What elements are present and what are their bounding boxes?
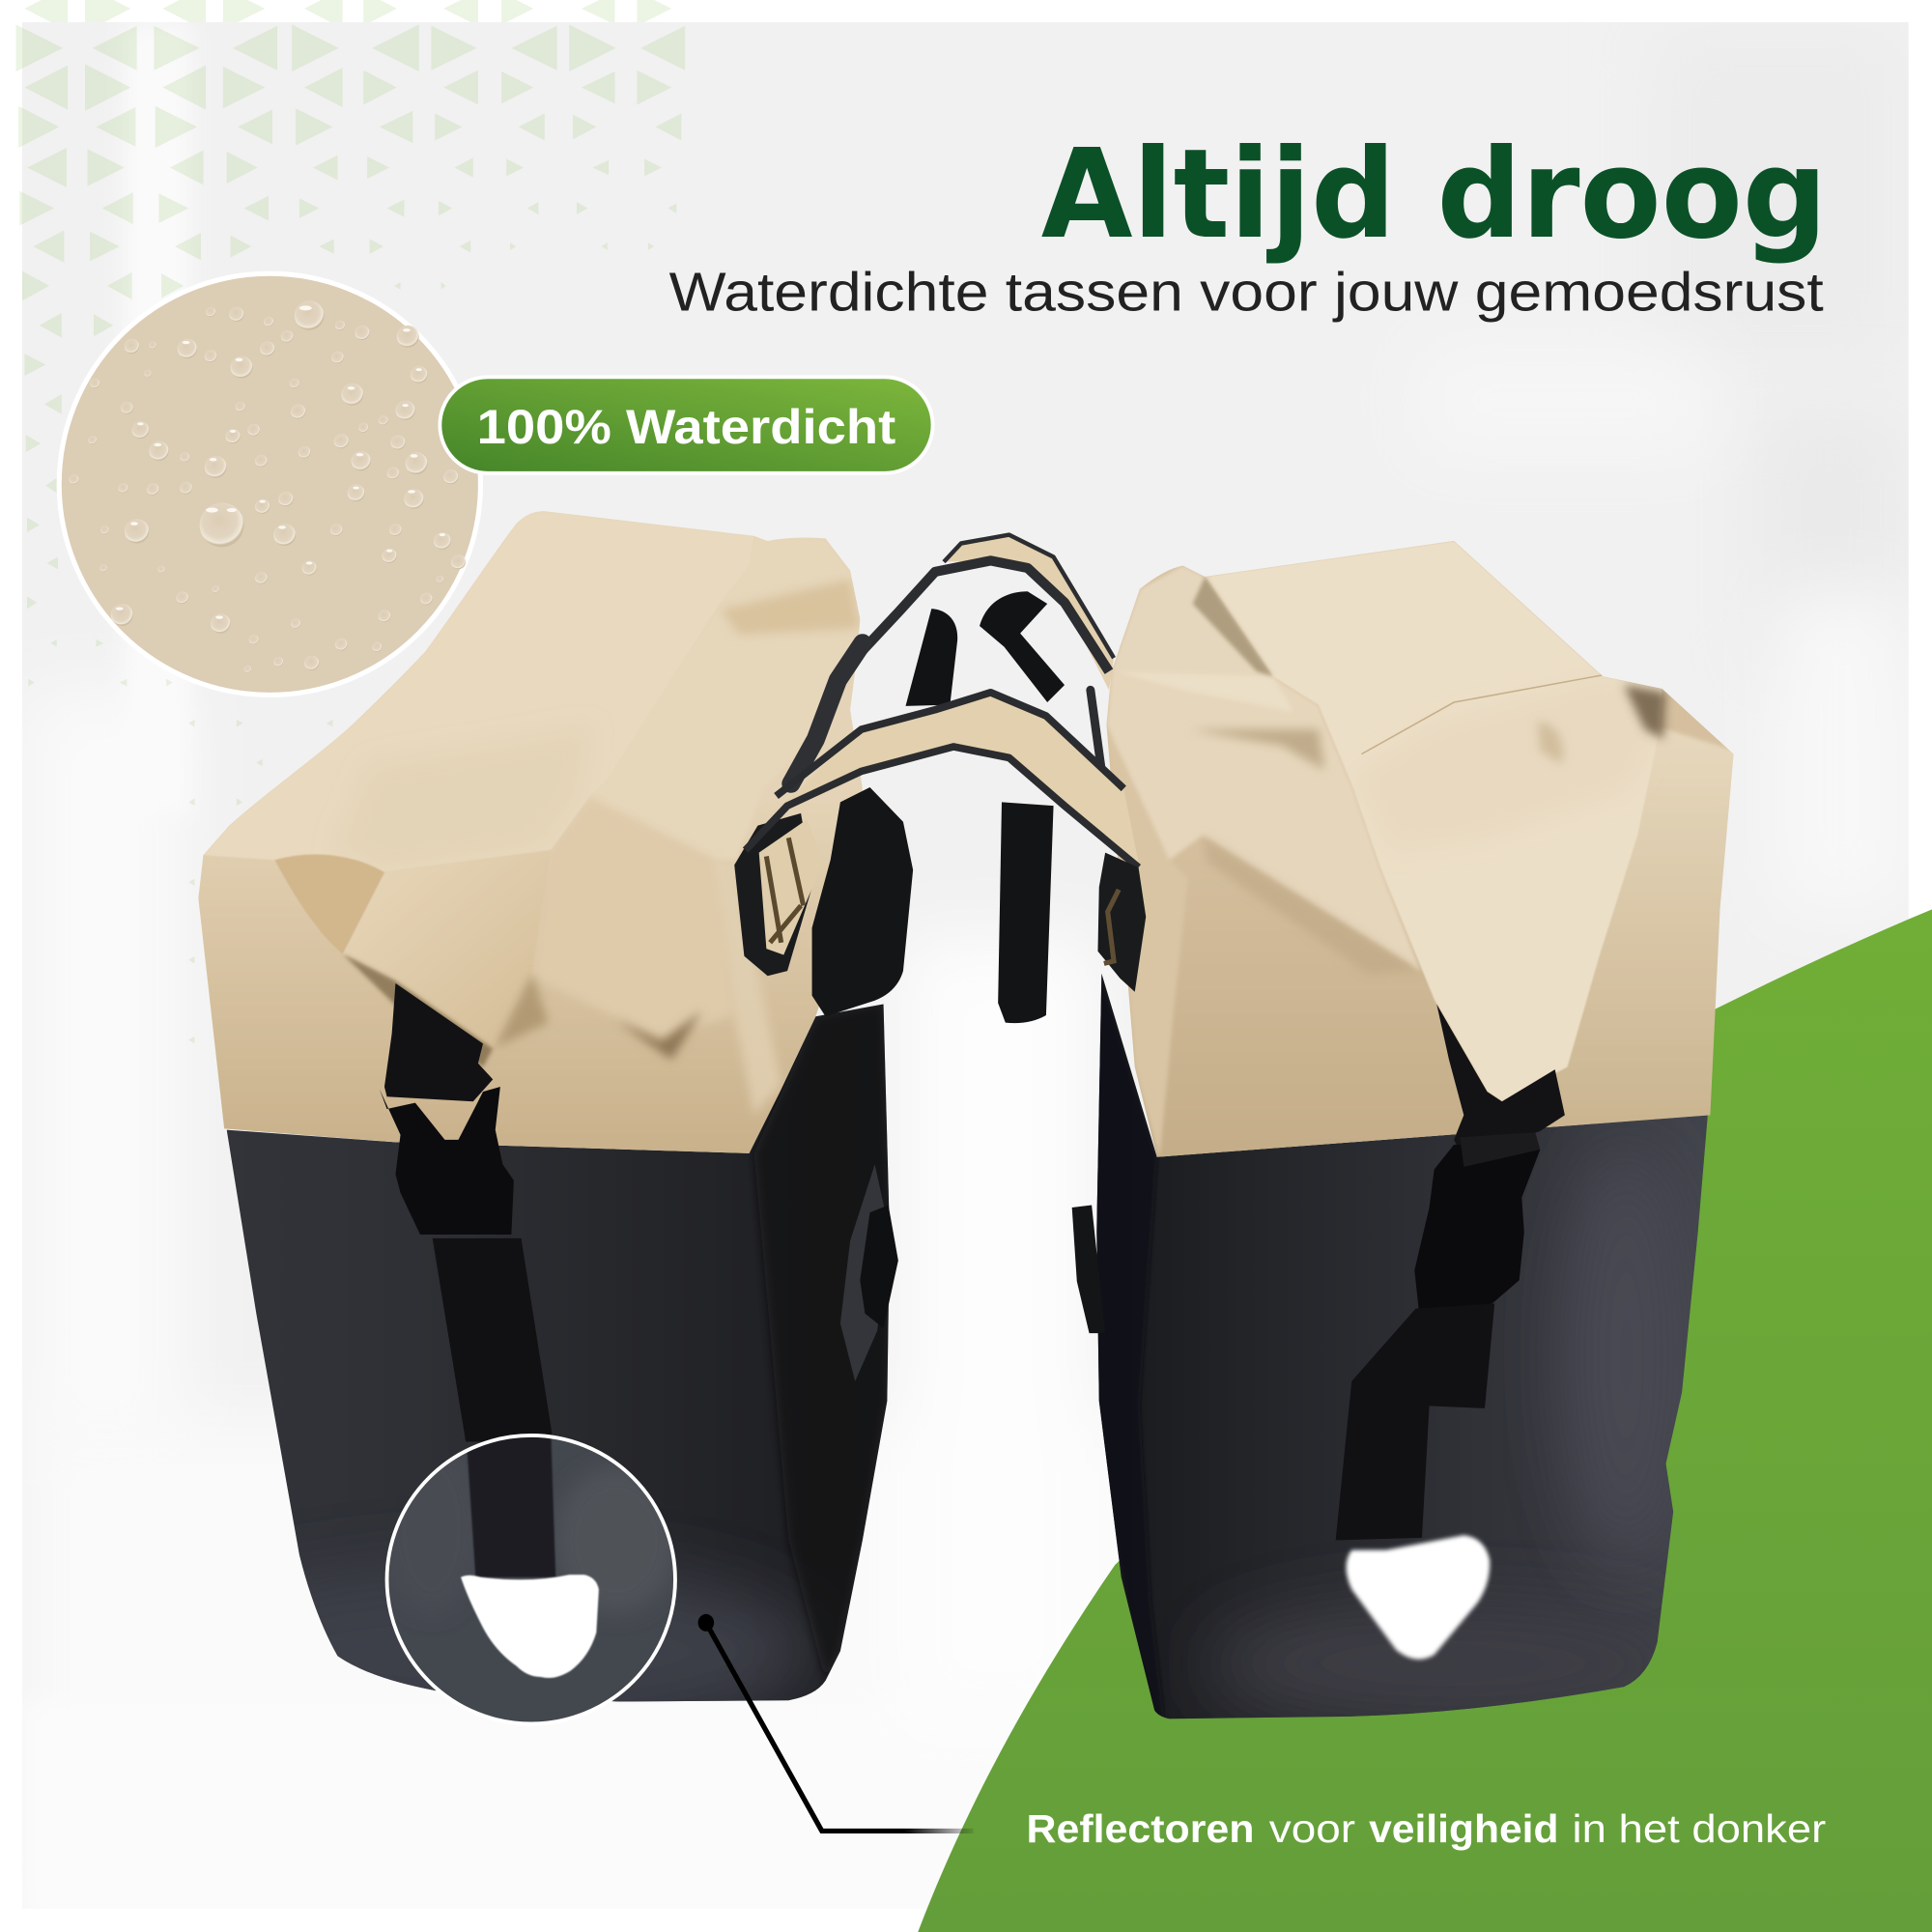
left bag tan body <box>199 511 863 1153</box>
product: centre carrier straps <box>734 535 1146 1023</box>
right bracket end <box>1097 853 1146 992</box>
reflector in zoom circle <box>461 1575 599 1678</box>
right side clip <box>1072 1205 1105 1333</box>
front band black binding <box>746 693 1139 867</box>
left strap and buckle <box>380 983 554 1441</box>
upper left velcro strap <box>906 609 957 706</box>
callout leader line with dot <box>698 1614 974 1831</box>
badge: 100% Waterdicht: 100% Waterdicht <box>477 400 895 454</box>
green curved panel <box>918 909 1932 1932</box>
back band left drop <box>791 643 863 783</box>
callout text: reflectors: in het donker <box>1573 1806 1826 1851</box>
front carrier band <box>770 693 1139 863</box>
zoom circle: reflector detail <box>382 1430 678 1723</box>
left bag black base <box>226 1005 889 1702</box>
subtitle: Waterdichte tassen voor jouw gemoedsrust <box>669 261 1824 322</box>
callout text: reflectors: voor <box>1269 1806 1355 1851</box>
callout text: reflectors <box>1026 1806 1826 1851</box>
left bracket <box>734 813 823 976</box>
right strap and buckle <box>1336 1005 1565 1540</box>
background triangle pattern <box>16 0 685 1043</box>
back carrier band <box>944 535 1114 690</box>
product: right pannier <box>1072 529 1749 1737</box>
callout text: reflectors: Reflectoren <box>1026 1806 1254 1851</box>
left side clip <box>840 1164 898 1381</box>
material circle with water drops <box>59 273 480 695</box>
upper right velcro strap <box>980 591 1065 702</box>
strap in zoom circle <box>466 1430 555 1577</box>
right bag tan body <box>1084 529 1749 1171</box>
badge: 100% Waterdicht <box>440 377 933 473</box>
product: left pannier <box>173 493 899 1737</box>
callout text: reflectors: veiligheid <box>1369 1806 1559 1851</box>
left velcro strap <box>812 787 913 1016</box>
centre velcro strap <box>998 802 1054 1023</box>
right bag black base <box>1084 961 1725 1737</box>
title: Altijd droog <box>1041 124 1828 267</box>
right reflector <box>1346 1535 1490 1660</box>
